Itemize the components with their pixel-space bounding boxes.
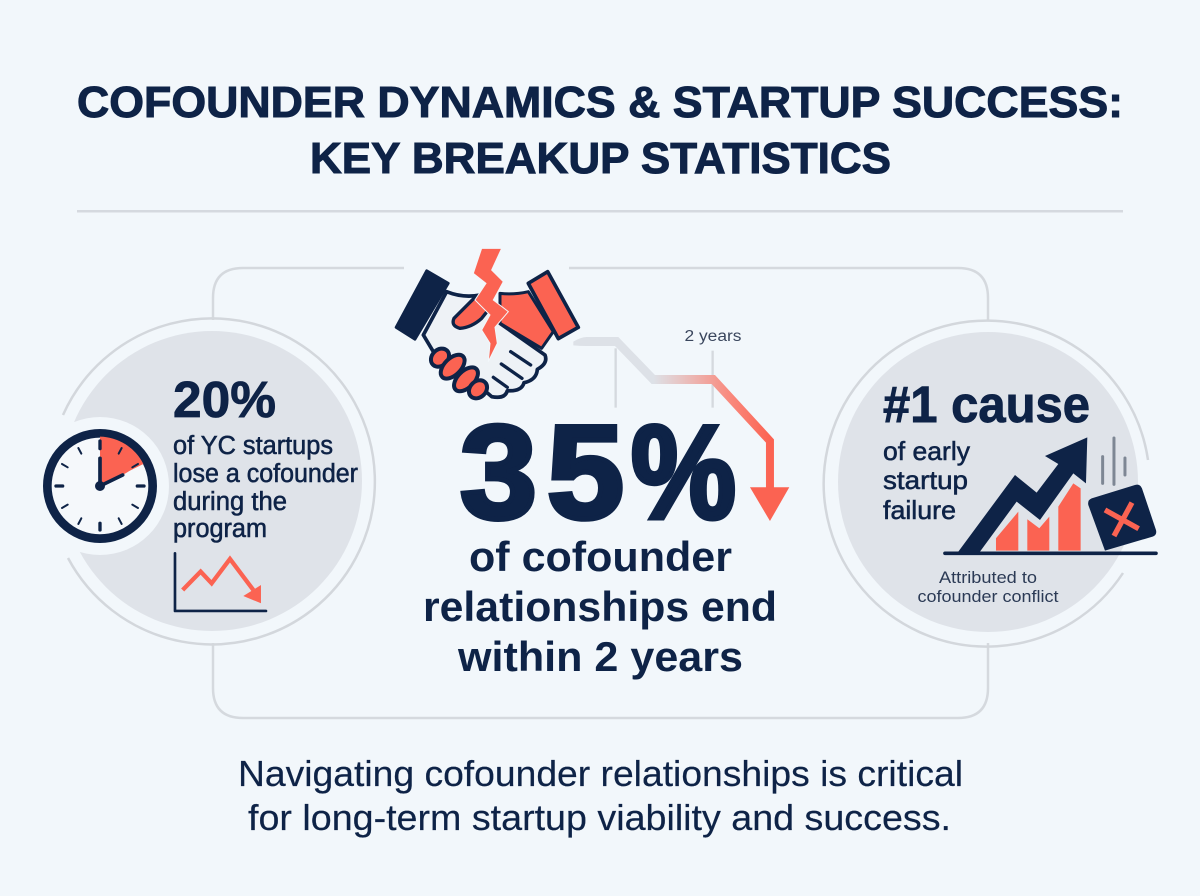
- title: COFOUNDER DYNAMICS & STARTUP SUCCESS:: [77, 78, 1123, 127]
- stat: 35%: 5: [547, 399, 624, 547]
- description: cofounder relationships: within 2 years: [457, 633, 743, 680]
- panel ring: [824, 321, 1148, 647]
- panel ring: [63, 318, 375, 644]
- description: cofounder relationships: of cofounder: [469, 533, 732, 580]
- description: early startup failure: startup: [883, 465, 968, 495]
- caption: attributed to cofounder conflict: cofounder conflict: [918, 588, 1059, 606]
- description: cofounder relationships: [423, 533, 777, 680]
- stat: 20%: 20%: [173, 371, 276, 428]
- description: early startup failure: failure: [883, 495, 956, 525]
- description: YC startups: program: [173, 515, 267, 543]
- description: YC startups: during the: [173, 488, 287, 516]
- stat: 35%: 3: [460, 399, 537, 547]
- title: KEY BREAKUP STATISTICS: [310, 134, 891, 183]
- icon: chart with failure card: [945, 437, 1156, 553]
- description: YC startups: [173, 432, 358, 543]
- panel: #1 cause: [824, 321, 1156, 647]
- icon: declining mini chart: [175, 553, 266, 611]
- title: [77, 78, 1123, 183]
- closing statement: Navigating cofounder relationships is critical: [238, 753, 963, 794]
- panel background circle: [62, 331, 362, 631]
- clock halo: [31, 417, 169, 555]
- description: YC startups: lose a cofounder: [173, 460, 358, 488]
- stat: 35%: %: [631, 399, 736, 547]
- icon: broken handshake: [396, 248, 578, 402]
- label: 2 years: 2 years: [684, 328, 742, 345]
- description: early startup failure: [883, 436, 970, 525]
- panel: 20% of YC startups: [31, 318, 375, 644]
- panel background circle: [838, 332, 1138, 632]
- description: YC startups: of YC startups: [173, 432, 333, 460]
- chart: two-year decline arrow: [573, 337, 789, 521]
- description: early startup failure: of early: [883, 436, 970, 466]
- closing statement: for long-term startup viability and success.: [248, 797, 951, 838]
- stat: 35%: [460, 399, 736, 547]
- icon: clock: [47, 433, 153, 539]
- caption: attributed to cofounder conflict: [918, 569, 1059, 606]
- stat: #1 cause: #1 cause: [883, 376, 1090, 433]
- description: cofounder relationships: relationships end: [423, 583, 777, 630]
- caption: attributed to cofounder conflict: Attributed to: [939, 569, 1037, 587]
- connector frame: [213, 268, 988, 718]
- closing statement: [238, 753, 963, 838]
